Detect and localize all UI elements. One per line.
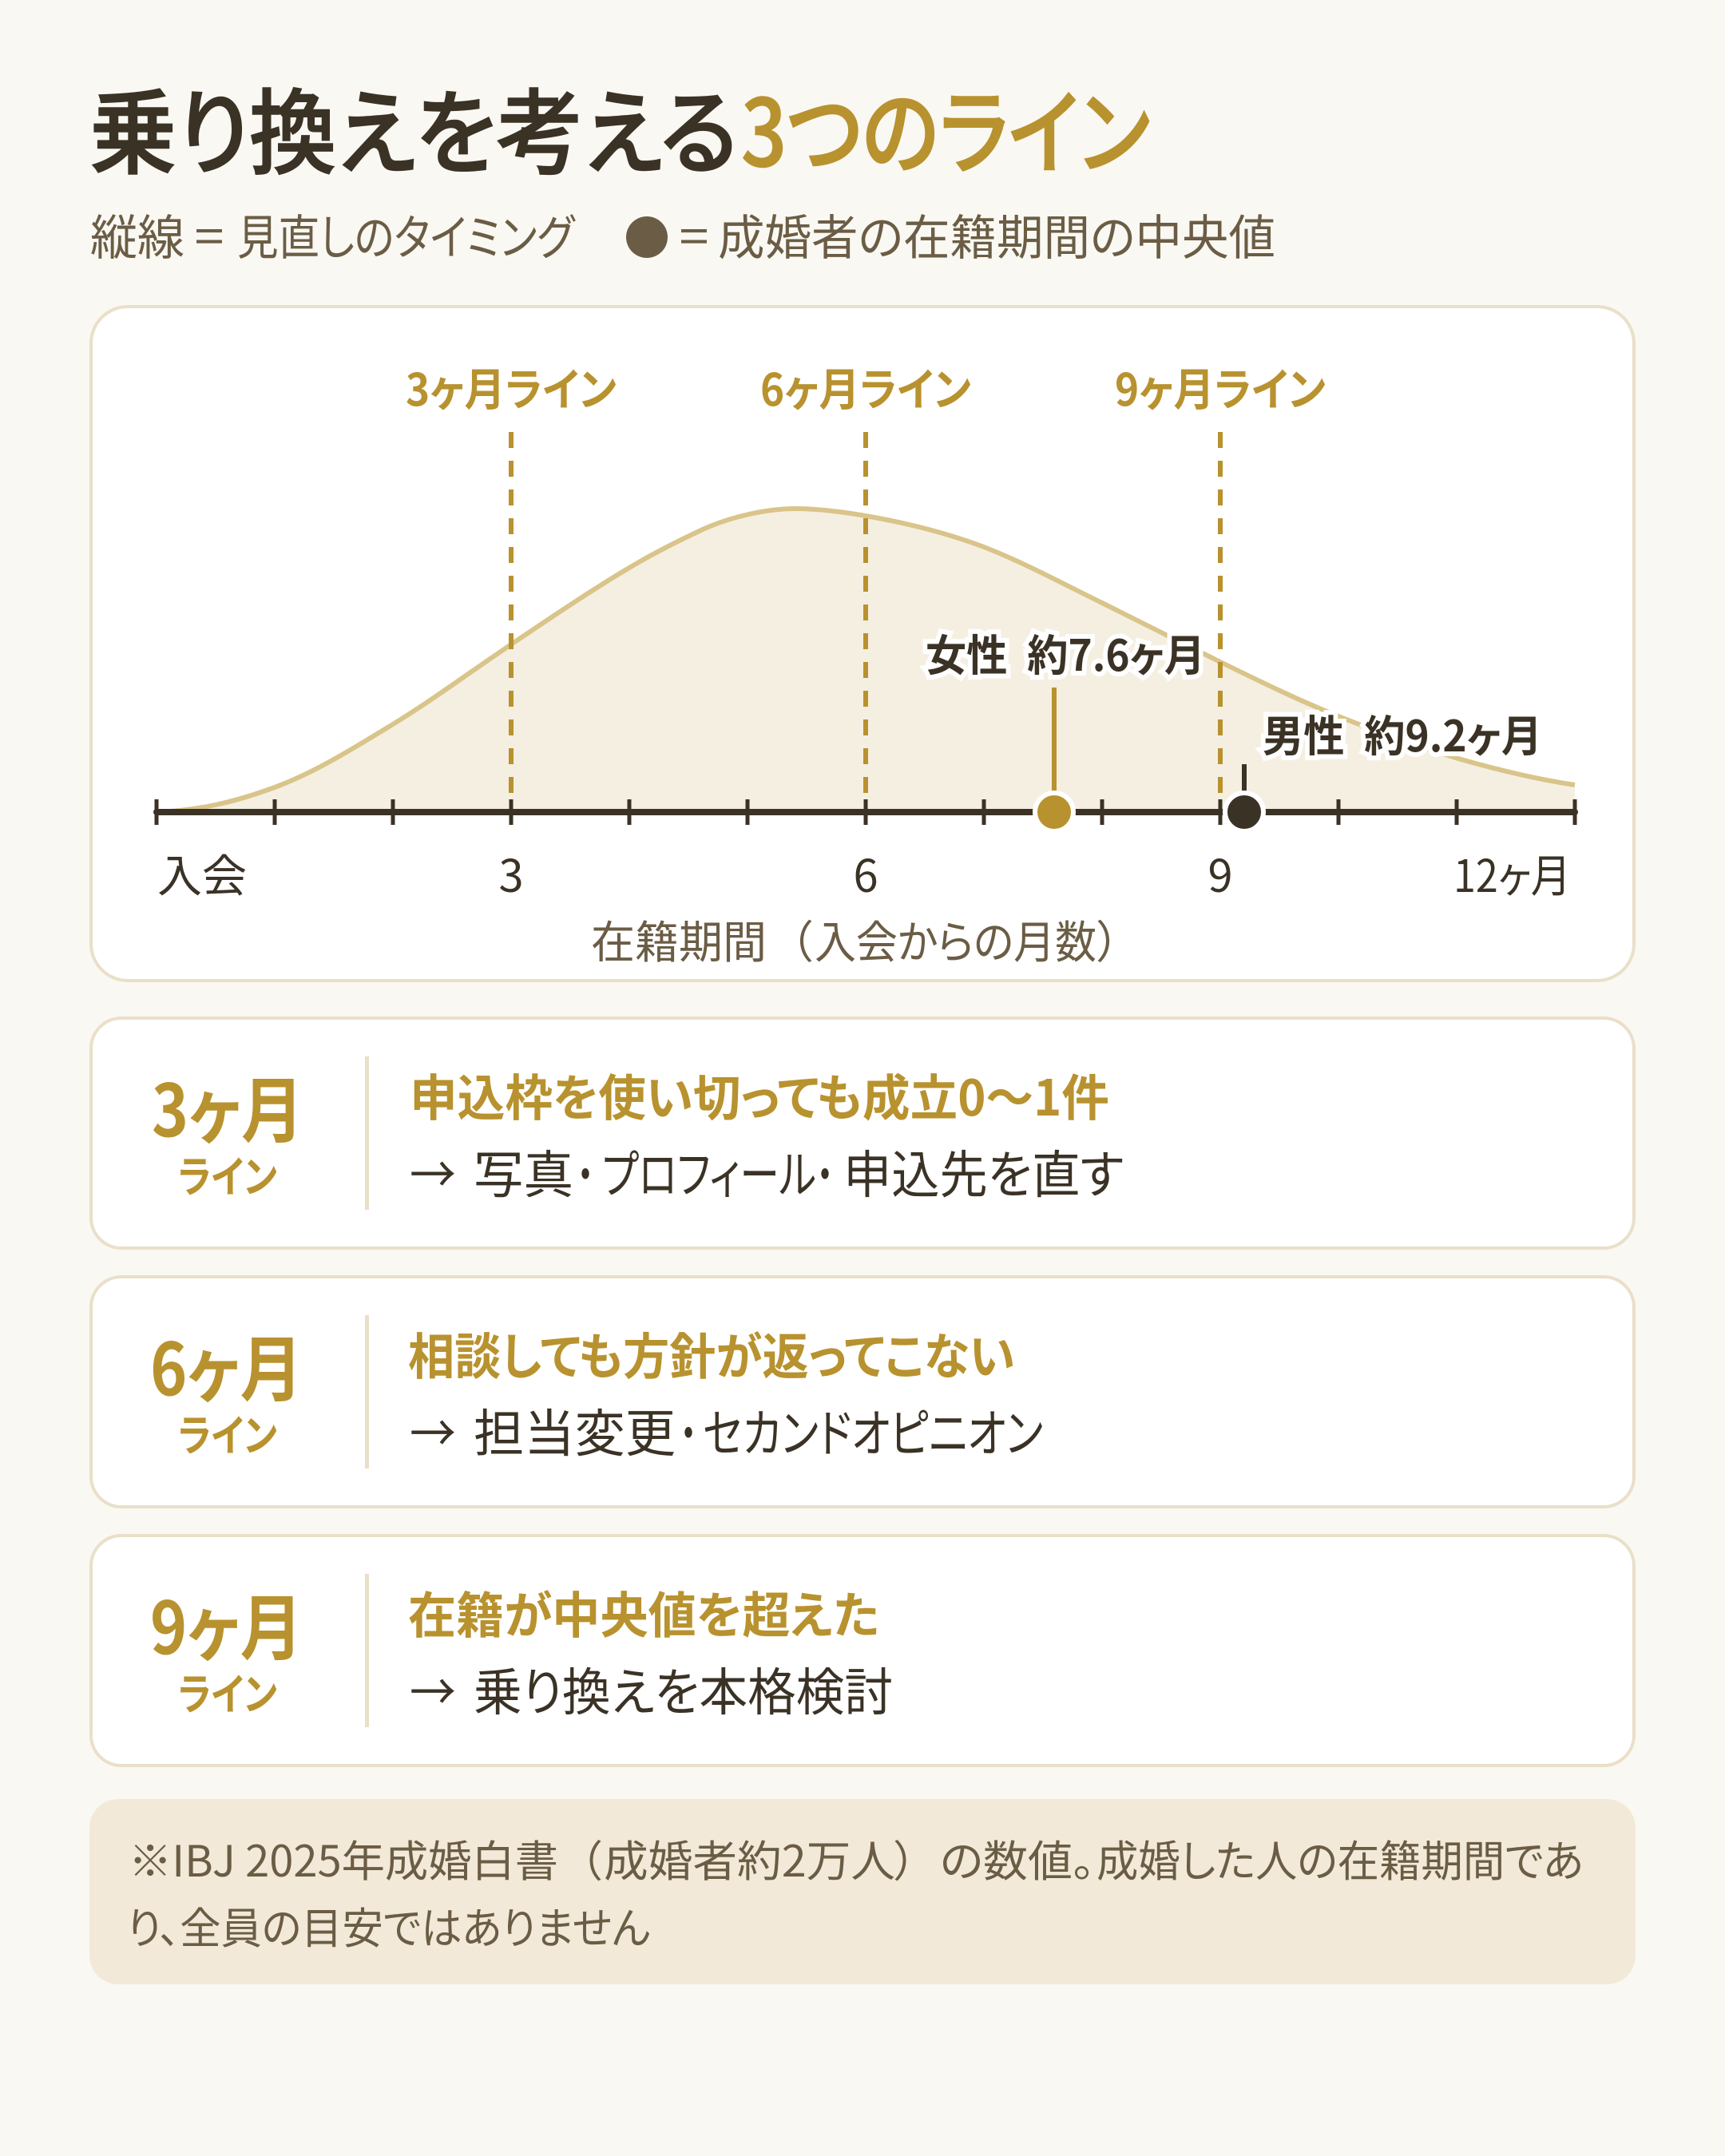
axis title: ） <box>1097 907 1120 972</box>
axis tick labels: 12ヶ月 <box>1453 841 1571 906</box>
distribution curve <box>157 509 1575 812</box>
9 month label: 9ヶ月 <box>150 1571 303 1674</box>
action: → <box>410 1393 456 1467</box>
action: 乗り換えを本格検討 <box>474 1652 893 1726</box>
action: 申込先を直す <box>843 1135 1124 1208</box>
line word: ライン <box>178 1142 277 1205</box>
line labels <box>406 355 1326 419</box>
action: → <box>410 1652 456 1726</box>
title <box>89 59 1150 193</box>
axis tick labels: 3 <box>498 841 524 906</box>
axis title: 入会からの月数 <box>815 907 1096 972</box>
action: 担当変更 <box>474 1393 676 1467</box>
axis tick labels: 入会 <box>157 841 247 906</box>
title: 乗り換えを考える <box>89 59 738 193</box>
footnote text: の数値。 <box>940 1826 1095 1889</box>
card: 9 month line <box>91 1536 1634 1766</box>
condition: 相談しても方針が返ってこない <box>408 1317 1015 1389</box>
subtitle legend <box>90 200 1275 269</box>
action: 写真 <box>474 1135 573 1208</box>
axis tick labels: 6 <box>853 841 878 906</box>
6 month label: 6ヶ月 <box>150 1312 303 1416</box>
line word: ライン <box>178 1401 277 1464</box>
divider <box>365 1056 369 1210</box>
3 month label: 3ヶ月 <box>152 1053 303 1157</box>
title: 3つのライン <box>741 59 1150 193</box>
axis title: 在籍期間 <box>591 907 767 972</box>
divider <box>365 1574 369 1727</box>
footnote text: 成婚者約2万人 <box>604 1826 895 1889</box>
line word: ライン <box>178 1659 277 1722</box>
action: ・ <box>577 1135 594 1208</box>
axis title: （ <box>790 907 812 972</box>
female label: 女性 約7.6ヶ月 <box>926 620 1205 684</box>
subtitle legend: 成婚者の在籍期間の中央値 <box>718 200 1275 269</box>
line labels: 3ヶ月ライン <box>406 355 617 419</box>
action <box>410 1393 1043 1467</box>
axis title <box>591 907 1120 972</box>
line labels: 9ヶ月ライン <box>1115 355 1326 419</box>
male median marker <box>1225 764 1263 831</box>
action: ・ <box>680 1393 697 1467</box>
condition: 在籍が中央値を超えた <box>408 1575 879 1647</box>
card: 3 month line <box>91 1018 1634 1248</box>
action: → <box>410 1135 456 1208</box>
footnote text <box>127 1826 1584 1956</box>
dashed line markers <box>511 432 1220 793</box>
footnote text: ） <box>894 1826 916 1889</box>
subtitle legend: 見直しのタイミング <box>237 200 576 269</box>
female median marker <box>1035 688 1073 831</box>
footnote text: ※IBJ 2025年成婚白書 <box>129 1826 558 1889</box>
axis tick labels: 9 <box>1208 841 1233 906</box>
condition: 申込枠を使い切っても成立0〜1件 <box>410 1058 1109 1130</box>
action: ・ <box>816 1135 834 1208</box>
subtitle legend: 縦線 <box>90 200 184 269</box>
divider <box>365 1315 369 1468</box>
card: 6 month line <box>91 1277 1634 1507</box>
panel: chart <box>91 307 1634 981</box>
male label: 男性 約9.2ヶ月 <box>1263 701 1542 764</box>
footnote text: 成婚した人の在籍期間であ <box>1096 1826 1584 1889</box>
line labels: 6ヶ月ライン <box>760 355 971 419</box>
action: セカンドオピニオン <box>703 1393 1043 1467</box>
axis <box>157 799 1575 825</box>
footnote panel <box>89 1799 1636 1984</box>
footnote text: （ <box>580 1826 601 1889</box>
axis tick labels <box>157 841 1571 906</box>
footnote text: り、全員の目安ではありません <box>127 1893 650 1956</box>
action <box>410 1135 1124 1208</box>
action: プロフィール <box>602 1135 816 1208</box>
subtitle legend: ＝ <box>676 200 712 269</box>
subtitle legend: ＝ <box>192 200 227 269</box>
